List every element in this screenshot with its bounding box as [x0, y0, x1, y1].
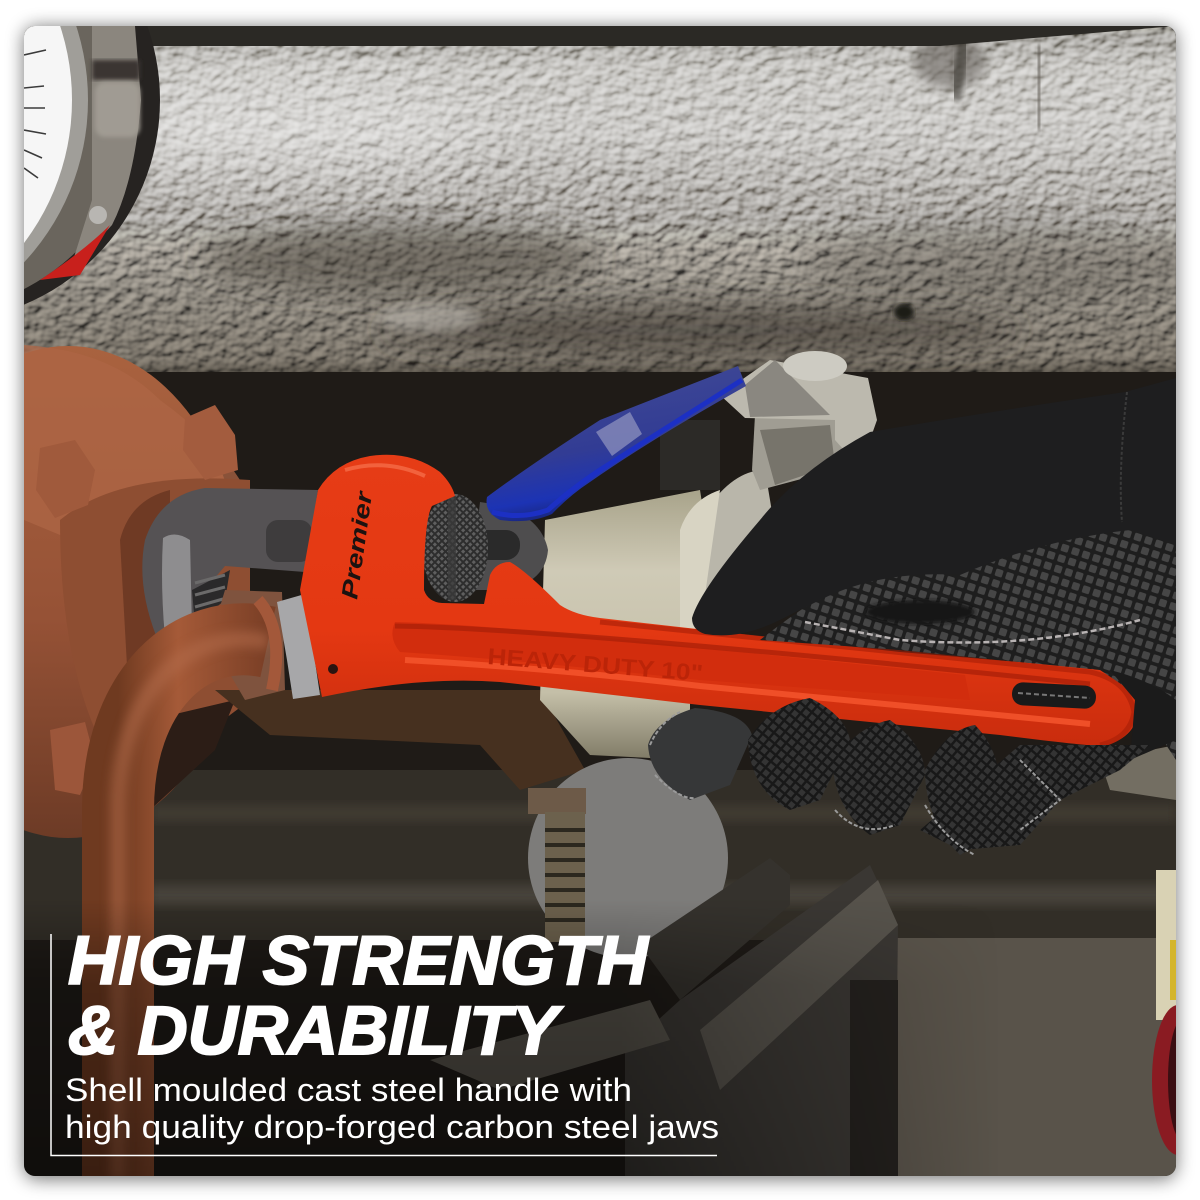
glove back — [692, 432, 1176, 636]
heading: HIGH STRENGTH — [68, 922, 650, 999]
knurled adjusting nut — [422, 494, 548, 602]
caption darkening overlay — [24, 915, 927, 1176]
lower serrated jaw — [277, 594, 320, 699]
pipe fitting behind jaw — [220, 590, 285, 700]
palm stitching — [805, 620, 1140, 642]
right edge objects — [1152, 870, 1176, 1155]
copper tube — [118, 600, 276, 1180]
hang hole — [1011, 682, 1097, 709]
heading: & DURABILITY — [68, 992, 564, 1069]
valve stem and lever — [720, 351, 877, 490]
copper flange — [0, 345, 250, 838]
handle recess — [392, 622, 936, 672]
silver insulated pipe — [24, 26, 1200, 376]
caption frame — [51, 934, 717, 1156]
description text — [65, 1072, 719, 1145]
rivet — [328, 664, 338, 674]
pipe wrench — [277, 455, 1138, 746]
heading — [68, 934, 650, 1056]
gloved hand — [648, 378, 1176, 855]
background patch under wrist — [1100, 745, 1176, 800]
threaded rod and grey disc — [528, 758, 728, 958]
cast handle text: HEAVY DUTY 10" — [487, 643, 704, 686]
bolt heads — [36, 405, 238, 795]
glove palm — [760, 527, 1176, 760]
rear brown pipe — [215, 690, 585, 790]
wrench body — [300, 455, 1138, 746]
description text: high quality drop-forged carbon steel jaws — [65, 1109, 719, 1145]
pressure gauge — [24, 26, 160, 304]
valve body — [540, 470, 780, 760]
description text: Shell moulded cast steel handle with — [65, 1072, 632, 1108]
blue valve handle — [487, 366, 746, 521]
lower fingers — [648, 698, 1150, 855]
vise block — [430, 858, 898, 1176]
handle highlight — [405, 660, 1090, 724]
grey adjustable hook jaw — [142, 488, 318, 650]
brand text: Premier — [336, 489, 377, 601]
